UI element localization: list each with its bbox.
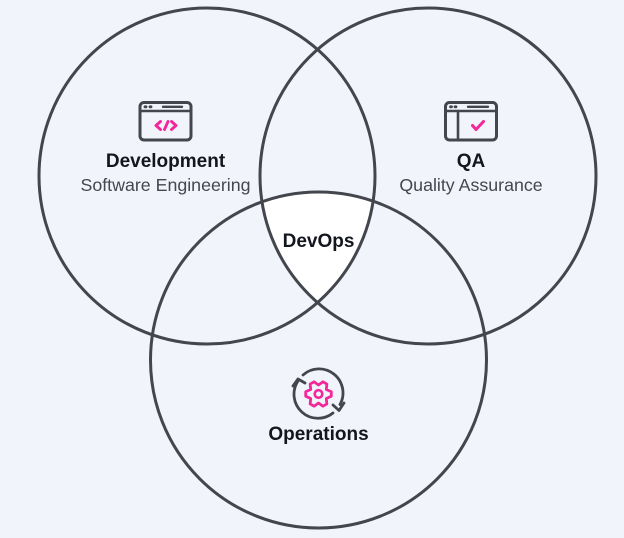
circle: Development (39, 8, 375, 344)
heading: Operations: Operations (268, 424, 369, 445)
text: Software Engineering: Software Engineering (80, 175, 251, 195)
heading: QA: QA (457, 151, 486, 172)
center overlap: DevOps region (264, 194, 372, 300)
circle: QA (260, 8, 596, 344)
text: Quality Assurance: Quality Assurance (399, 175, 543, 195)
heading: Development: Development (106, 151, 226, 172)
icon: QA window (446, 102, 496, 140)
icon: code window (140, 102, 191, 140)
circle: Operations (150, 192, 486, 528)
heading: DevOps: DevOps (283, 231, 354, 252)
icon: operations gear cycle (293, 369, 344, 418)
